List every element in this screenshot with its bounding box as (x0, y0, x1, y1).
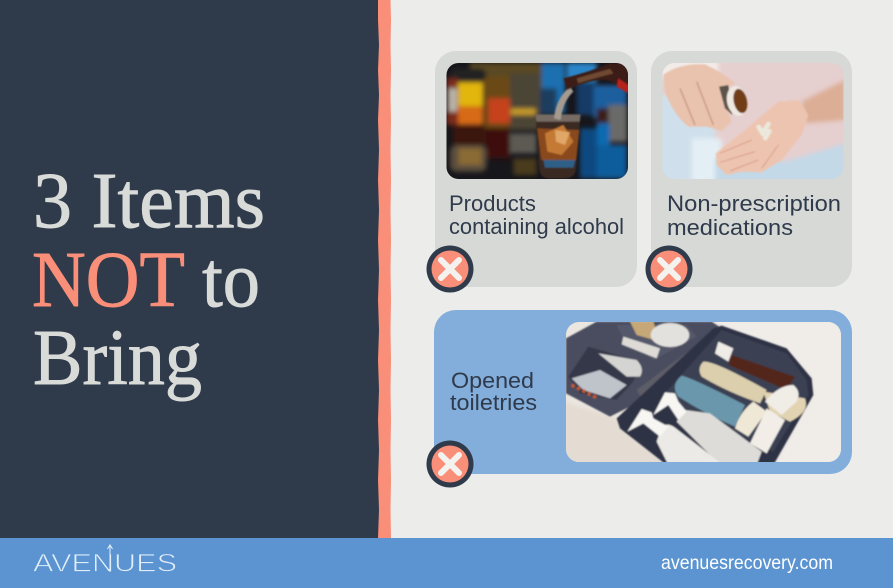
icon: x badge (426, 246, 474, 292)
panel: dark title panel (0, 0, 379, 538)
title: NOT to (32, 237, 260, 324)
pouring bottle (563, 63, 630, 90)
white pump bottles (677, 410, 762, 465)
panel: opened toiletries (426, 310, 852, 488)
left bottle (449, 66, 488, 106)
photo: alcohol pouring (446, 63, 630, 179)
panel: products containing alcohol (426, 51, 637, 292)
title: 3 Items (33, 158, 265, 245)
website url: avenuesrecovery.com (661, 552, 833, 574)
label: opened toiletries: toiletries (450, 390, 537, 415)
pills (755, 121, 773, 141)
bag body (617, 326, 813, 465)
title (32, 158, 265, 402)
card background (435, 51, 637, 287)
lower hand (716, 100, 808, 175)
lid pouch (568, 347, 640, 400)
logo: Avenues: AVENUES (33, 550, 177, 578)
upper hand (663, 64, 735, 131)
bag lid (566, 322, 722, 417)
icon: x badge (426, 440, 474, 488)
label: opened toiletries: Opened (451, 368, 534, 393)
jar and cap (750, 408, 785, 453)
amber bottle (728, 355, 795, 390)
pouring stream (554, 87, 573, 120)
title: Bring (33, 315, 202, 402)
second bottle (483, 77, 512, 128)
card background (651, 51, 852, 287)
photo: pills in hand (662, 63, 844, 179)
card background (434, 310, 852, 474)
blue tube (675, 376, 745, 427)
label: products containing alcohol: containing alcohol (449, 214, 624, 239)
beige tube (763, 392, 806, 422)
label: products containing alcohol: Products (449, 191, 536, 216)
pill bottle (719, 85, 732, 115)
velcro strip (637, 354, 685, 396)
label: non-prescription medications: Non-prescription (667, 191, 841, 216)
center decanter (510, 73, 540, 130)
panel: non-prescription medications (646, 51, 852, 292)
label: non-prescription medications: medications (667, 215, 793, 240)
photo: toiletry bag (563, 318, 843, 465)
icon: x badge (646, 246, 692, 292)
footer bar (0, 538, 893, 588)
glass (535, 114, 581, 178)
coral rough divider stripe (378, 0, 391, 538)
